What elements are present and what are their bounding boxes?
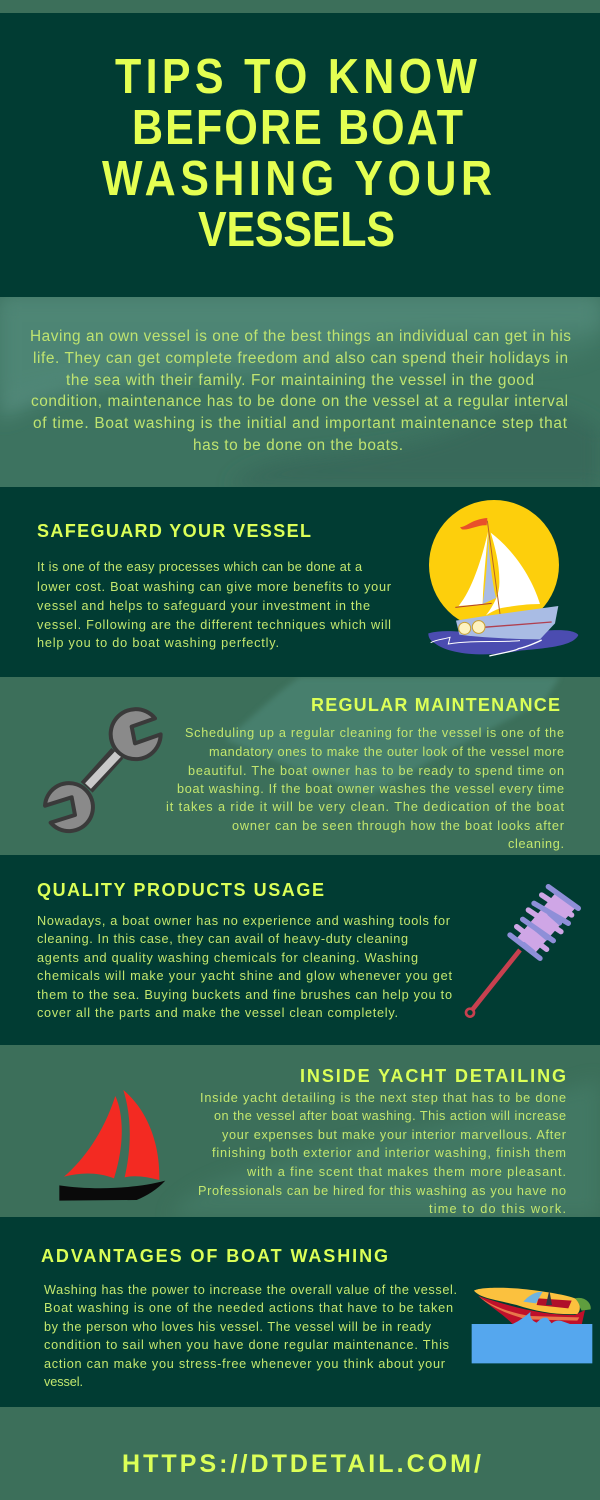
text: advantages: [44, 1283, 457, 1389]
heading: quality products usage: QUALITY PRODUCTS USAGE: [37, 880, 324, 900]
text: advantages: Washing has the power to increase the overall value of the vessel.: [44, 1283, 457, 1297]
title: WASHING YOUR: [102, 150, 492, 206]
heading: regular maintenance: REGULAR MAINTENANCE: [311, 695, 560, 715]
text: safeguard: lower cost. Boat washing can give more benefits to your: [37, 580, 392, 594]
panel: quality products usage: [0, 855, 600, 1045]
text: advantages: by the person who loves his vessel. The vessel will be in ready: [44, 1320, 432, 1334]
heading: safeguard your vessel: SAFEGUARD YOUR VESSEL: [37, 521, 311, 541]
text: inside yacht: your expenses but make your interior marvellous. After: [222, 1128, 567, 1142]
text: advantages: condition to sail when you have done regular maintenance. This: [44, 1338, 449, 1352]
title: VESSELS: [198, 201, 395, 257]
text: inside yacht: [198, 1091, 567, 1216]
panel: advantages of boat washing: [0, 1217, 600, 1407]
text: safeguard: It is one of the easy processes which can be done at a: [37, 560, 363, 574]
intro text: life. They can get complete freedom and also can spend their holidays in: [33, 350, 568, 367]
heading: inside yacht detailing: INSIDE YACHT DETAILING: [300, 1066, 566, 1086]
intro text: has to be done on the boats.: [193, 437, 403, 454]
text: regular maintenance: beautiful. The boat owner has to be ready to spend time on: [188, 764, 564, 778]
title: [102, 48, 492, 257]
intro text: of time. Boat washing is the initial and important maintenance step that: [33, 415, 568, 432]
text: quality products: them to the sea. Buying buckets and fine brushes can help you to: [37, 988, 452, 1002]
panel: safeguard your vessel: [0, 487, 600, 677]
text: regular maintenance: boat washing. If the boat owner washes the vessel every time: [177, 782, 564, 796]
text: regular maintenance: cleaning.: [508, 837, 564, 851]
text: regular maintenance: Scheduling up a regular cleaning for the vessel is one of the: [185, 726, 564, 740]
panel: regular maintenance: [0, 677, 600, 855]
text: safeguard: vessel. Following are the different techniques which will: [37, 618, 391, 632]
intro text: the sea with their family. For maintaining the vessel in the good: [66, 372, 534, 389]
text: advantages: Boat washing is one of the needed actions that have to be taken: [44, 1301, 453, 1315]
top strip: [0, 0, 600, 13]
text: inside yacht: time to do this work.: [429, 1202, 566, 1216]
text: advantages: vessel.: [44, 1375, 83, 1389]
text: quality products: [37, 914, 452, 1020]
text: regular maintenance: mandatory ones to make the outer look of the vessel more: [209, 745, 564, 759]
text: safeguard: [37, 560, 392, 650]
icon: sailboat with sun: [428, 500, 578, 656]
intro text: Having an own vessel is one of the best things an individual can get in his: [30, 328, 571, 345]
text: advantages: action can make you stress-free whenever you think about your: [44, 1357, 446, 1371]
intro text: [30, 328, 571, 454]
text: quality products: Nowadays, a boat owner has no experience and washing tools for: [37, 914, 451, 928]
text: quality products: cover all the parts and make the vessel clean completely.: [37, 1006, 398, 1020]
text: inside yacht: finishing both exterior and interior washing, finish them: [212, 1146, 566, 1160]
text: safeguard: vessel and helps to safeguard your investment in the: [37, 599, 370, 613]
text: regular maintenance: it takes a ride it will be very clean. The dedication of the boat: [166, 800, 564, 814]
footer url: HTTPS://DTDETAIL.COM/: [122, 1450, 481, 1478]
icon: speedboat on water: [472, 1288, 592, 1363]
icon: wrench: [45, 709, 161, 831]
text: inside yacht: Professionals can be hired for this washing as you have no: [198, 1184, 566, 1198]
heading: advantages of boat washing: ADVANTAGES OF BOAT WASHING: [41, 1246, 388, 1266]
panel: footer: [0, 1407, 600, 1500]
icon: red sailing ship: [59, 1090, 165, 1201]
icon: cleaning brush: [466, 887, 578, 1017]
panel: introduction: [0, 297, 600, 487]
panel: inside yacht detailing: [0, 1045, 600, 1217]
text: quality products: chemicals will make your yacht shine and glow whenever you get: [37, 969, 452, 983]
text: quality products: cleaning. In this case, they can avail of heavy-duty cleaning: [37, 932, 408, 946]
text: inside yacht: Inside yacht detailing is the next step that has to be done: [200, 1091, 566, 1105]
text: quality products: agents and quality washing chemicals for cleaning. Washing: [37, 951, 418, 965]
text: inside yacht: with a fine scent that makes them more pleasant.: [246, 1165, 566, 1179]
text: inside yacht: on the vessel after boat washing. This action will increase: [214, 1109, 566, 1123]
panel: title: [0, 13, 600, 297]
intro text: condition, maintenance has to be done on the vessel at a regular interval: [31, 393, 568, 410]
text: regular maintenance: [166, 726, 565, 851]
title: BEFORE BOAT: [132, 99, 463, 155]
text: regular maintenance: owner can be seen through how the boat looks after: [232, 819, 565, 833]
title: TIPS TO KNOW: [115, 48, 477, 104]
text: safeguard: help you to do boat washing perfectly.: [37, 636, 279, 650]
